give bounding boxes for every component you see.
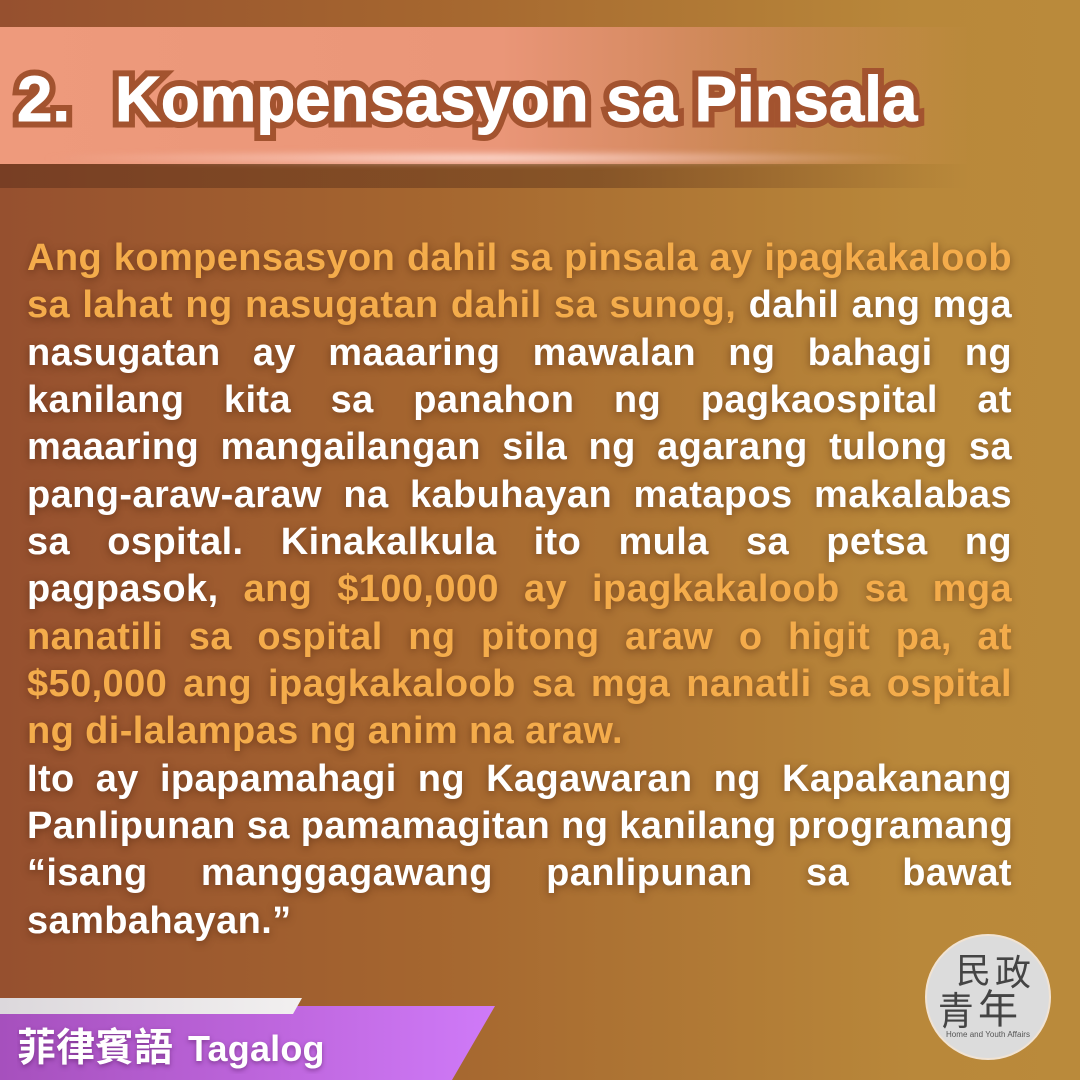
language tag xyxy=(0,998,495,1080)
language label: 菲律賓語 Tagalog xyxy=(17,1027,325,1070)
body text: Ang kompensasyon dahil sa pinsala ay ipagkakaloob xyxy=(27,237,1012,279)
body text: maaaring mangailangan sila ng agarang tulong sa xyxy=(27,426,1012,468)
body text: pagpasok, ang $100,000 ay ipagkakaloob sa mga xyxy=(27,568,1012,610)
title banner xyxy=(0,27,924,188)
logo: Home and Youth Affairs xyxy=(925,934,1051,1060)
body text: pang-araw-araw na kabuhayan matapos makalabas xyxy=(27,474,1012,516)
body text: “isang manggagawang panlipunan sa bawat xyxy=(27,852,1012,894)
body text: sa lahat ng nasugatan dahil sa sunog, dahil ang mga xyxy=(27,284,1012,326)
white strip xyxy=(0,998,302,1014)
banner shadow strip xyxy=(0,164,1000,188)
body text xyxy=(26,237,1014,945)
banner glow xyxy=(40,145,920,171)
body text: Panlipunan sa pamamagitan ng kanilang programang xyxy=(27,805,1013,847)
banner band xyxy=(0,27,1000,164)
body text: sa ospital. Kinakalkula ito mula sa petsa ng xyxy=(27,521,1012,563)
logo: Home and Youth Affairs: Home and Youth Affairs xyxy=(946,1030,1030,1039)
purple tag shape xyxy=(0,1006,495,1080)
logo: Home and Youth Affairs: 政 xyxy=(995,944,1031,996)
body text: nanatili sa ospital ng pitong araw o higit pa, at xyxy=(27,616,1012,658)
logo: Home and Youth Affairs: 青 xyxy=(938,980,974,1036)
body text: nasugatan ay maaaring mawalan ng bahagi ng xyxy=(27,332,1012,374)
logo: Home and Youth Affairs: 年 xyxy=(978,977,1018,1035)
body text: $50,000 ang ipagkakaloob sa mga nanatli sa ospital xyxy=(27,663,1012,705)
body text: ng di-lalampas ng anim na araw. xyxy=(27,710,623,752)
heading: Kompensasyon sa Pinsala xyxy=(115,64,917,135)
body text: Ito ay ipapamahagi ng Kagawaran ng Kapakanang xyxy=(27,758,1012,800)
logo: Home and Youth Affairs: 民 xyxy=(956,943,991,994)
body text: kanilang kita sa panahon ng pagkaospital at xyxy=(27,379,1012,421)
heading: 2. xyxy=(17,64,70,135)
heading: Kompensasyon sa Pinsala xyxy=(115,64,917,135)
heading: 2. xyxy=(17,64,70,135)
body text: sambahayan.” xyxy=(27,900,292,942)
